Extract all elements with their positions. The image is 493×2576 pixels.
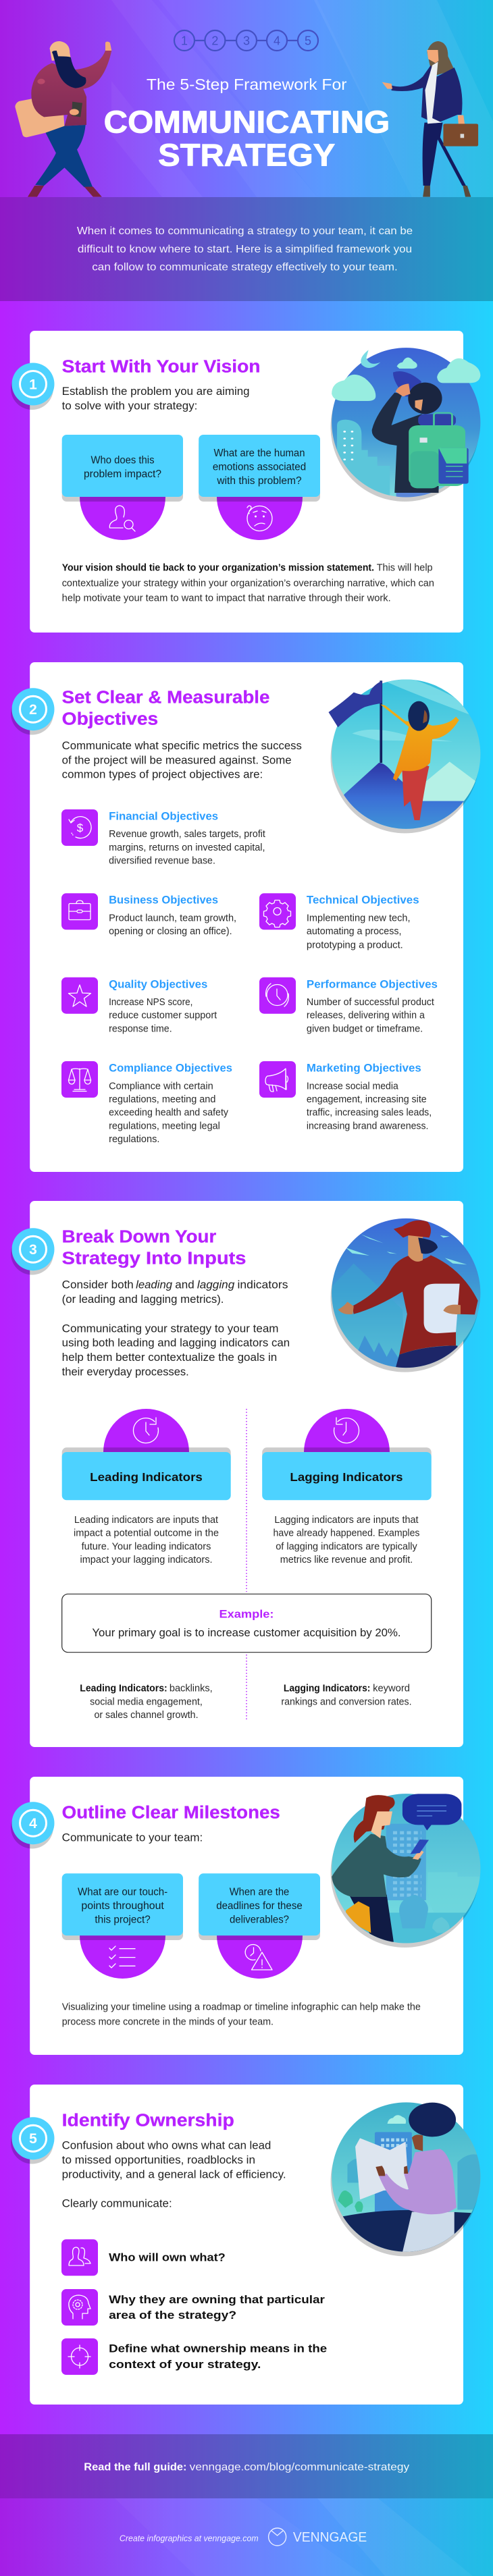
heading: Strategy Into Inputs bbox=[62, 1250, 246, 1268]
intro band bbox=[0, 197, 493, 301]
badge 3: 3 bbox=[29, 1242, 37, 1258]
objective: performance: releases, delivering within a bbox=[307, 1011, 425, 1021]
objective: quality: Increase NPS score, bbox=[109, 997, 192, 1008]
question card: deadlines: deliverables? bbox=[230, 1914, 289, 1926]
question card: deadlines bbox=[199, 1873, 320, 1979]
question card: emotions: What are the human bbox=[213, 448, 305, 459]
leading examples: Leading Indicators: bbox=[80, 1684, 167, 1694]
intro text: leading bbox=[136, 1279, 173, 1291]
objective: business: Product launch, team growth, bbox=[109, 913, 236, 923]
icon: clock backward bbox=[334, 1418, 359, 1443]
badge 5: 5 bbox=[29, 2131, 37, 2147]
intro text: of the project will be measured against. Some bbox=[62, 754, 292, 766]
subtitle: The 5-Step Framework For bbox=[147, 76, 347, 93]
panel: step 4 outline clear milestones bbox=[11, 1777, 484, 2055]
question card: who: Who does this bbox=[90, 455, 155, 466]
intro text: productivity, and a general lack of efficiency. bbox=[62, 2168, 286, 2180]
step progress circles: 2 bbox=[211, 34, 218, 47]
question card: emotions: with this problem? bbox=[216, 475, 302, 487]
objective: financial: $ bbox=[77, 822, 84, 834]
badge 2: 2 bbox=[29, 702, 37, 718]
intro text: Communicate to your team: bbox=[62, 1831, 203, 1844]
leading indicators card: Leading Indicators bbox=[90, 1470, 203, 1484]
item: why they are owning: Why they are owning that particular bbox=[109, 2293, 325, 2306]
illustration: hiker with binoculars bbox=[331, 348, 480, 504]
intro text: common types of project objectives are: bbox=[62, 769, 263, 781]
panel: step 2 set clear & measurable objectives bbox=[11, 662, 484, 1172]
question card: emotions bbox=[199, 435, 320, 540]
objective: financial: diversified revenue base. bbox=[109, 855, 215, 866]
example callout: Example: bbox=[219, 1609, 274, 1621]
intro text: difficult to know where to start. Here is a simplified framework you bbox=[78, 244, 412, 255]
objective: technical: Implementing new tech, bbox=[307, 913, 411, 923]
objective: marketing: traffic, increasing sales leads, bbox=[307, 1108, 432, 1119]
objective: technical: prototyping a product. bbox=[307, 940, 403, 950]
illustration: woman planting flag on a peak bbox=[327, 678, 484, 833]
heading: Outline Clear Milestones bbox=[62, 1803, 280, 1822]
lagging examples: keyword bbox=[373, 1684, 410, 1694]
leading indicators card bbox=[62, 1409, 231, 1500]
intro text bbox=[62, 2140, 286, 2209]
lagging indicators card bbox=[262, 1409, 432, 1500]
lagging indicators card: Lagging Indicators bbox=[290, 1470, 403, 1484]
item: why they are owning: area of the strategy? bbox=[109, 2309, 236, 2322]
dotted divider bbox=[246, 1409, 247, 1721]
leading description: impact your lagging indicators. bbox=[80, 1555, 212, 1565]
intro text: Confusion about who owns what can lead bbox=[62, 2140, 271, 2152]
body paragraph: process more concrete in the minds of your team. bbox=[62, 2016, 274, 2027]
heading: Identify Ownership bbox=[62, 2111, 234, 2130]
intro text bbox=[62, 740, 302, 781]
lagging description: of lagging indicators are typically bbox=[276, 1541, 417, 1552]
lagging examples: Lagging Indicators: bbox=[284, 1684, 370, 1694]
objective: financial: margins, returns on invested capital, bbox=[109, 842, 265, 853]
question card: touch-points: What are our touch- bbox=[78, 1886, 167, 1898]
badge 1: 1 bbox=[29, 377, 37, 393]
venngage wordmark: VENNGAGE bbox=[293, 2530, 367, 2545]
example callout bbox=[62, 1594, 432, 1653]
objective: technical bbox=[259, 893, 419, 950]
leading description: Leading indicators are inputs that bbox=[74, 1515, 218, 1526]
heading: Start With Your Vision bbox=[62, 358, 260, 377]
objective: compliance: regulations. bbox=[109, 1134, 159, 1145]
heading bbox=[62, 689, 269, 729]
intro text: can follow to communicate strategy effectively to your team. bbox=[92, 262, 398, 273]
item: who will own what bbox=[61, 2239, 226, 2276]
intro text: their everyday processes. bbox=[62, 1366, 189, 1378]
intro text: help them better contextualize the goals in bbox=[62, 1351, 277, 1364]
example callout: Your primary goal is to increase customer acquisition by 20%. bbox=[92, 1627, 401, 1639]
item: define ownership bbox=[61, 2338, 327, 2375]
question card: emotions: emotions associated bbox=[213, 462, 306, 473]
intro text: Communicate what specific metrics the success bbox=[62, 740, 302, 752]
badge 1 bbox=[11, 363, 54, 410]
body paragraph bbox=[62, 563, 434, 604]
heading: Objectives bbox=[62, 710, 158, 729]
intro text: Communicating your strategy to your team bbox=[62, 1322, 278, 1335]
leading examples bbox=[80, 1684, 213, 1721]
lagging description bbox=[274, 1515, 419, 1565]
leading description bbox=[74, 1515, 219, 1565]
question card: deadlines: deadlines for these bbox=[216, 1900, 303, 1912]
read the guide link: Read the full guide: bbox=[84, 2461, 186, 2473]
badge 2 bbox=[11, 688, 54, 734]
objective: financial: Revenue growth, sales targets, profit bbox=[109, 829, 265, 840]
objective: technical: automating a process, bbox=[307, 926, 401, 937]
step progress circles: 5 bbox=[305, 34, 311, 47]
panel: hero header bbox=[0, 0, 493, 197]
badge 4: 4 bbox=[29, 1816, 37, 1831]
lagging examples bbox=[281, 1684, 412, 1708]
badge 3 bbox=[11, 1228, 54, 1274]
item: who will own what: Who will own what? bbox=[109, 2251, 226, 2263]
objective: business bbox=[61, 893, 236, 937]
title bbox=[104, 105, 390, 173]
branding footer bbox=[0, 2498, 493, 2576]
icon: confused face bbox=[247, 506, 272, 531]
objective: marketing bbox=[259, 1061, 432, 1131]
step progress circles bbox=[174, 30, 318, 51]
panel: step 3 break down your strategy into inputs bbox=[11, 1201, 480, 1747]
question card: touch-points: this project? bbox=[95, 1914, 151, 1926]
heading: Set Clear & Measurable bbox=[62, 689, 269, 707]
icon: venngage logo bbox=[269, 2528, 286, 2546]
body paragraph: Your vision should tie back to your organization’s mission statement. bbox=[62, 563, 374, 574]
intro text bbox=[62, 385, 250, 412]
objective: quality: response time. bbox=[109, 1023, 172, 1034]
objective: compliance: exceeding health and safety bbox=[109, 1108, 229, 1119]
item: define ownership: Define what ownership means in the bbox=[109, 2342, 327, 2355]
question card: who bbox=[62, 435, 183, 540]
question card: touch-points bbox=[62, 1873, 183, 1979]
intro text bbox=[62, 1279, 290, 1378]
body paragraph: contextualize your strategy within your organization’s overarching narrative, which can bbox=[62, 578, 434, 589]
intro text: to missed opportunities, roadblocks in bbox=[62, 2154, 255, 2166]
intro text: Clearly communicate: bbox=[62, 2197, 172, 2209]
body paragraph bbox=[62, 2002, 421, 2027]
question card: who: problem impact? bbox=[84, 468, 161, 480]
intro text: Consider both bbox=[62, 1279, 134, 1291]
badge 4 bbox=[11, 1802, 54, 1848]
panel: step 5 identify ownership bbox=[11, 2085, 484, 2405]
body paragraph: help motivate your team to want to impact that narrative through their work. bbox=[62, 593, 391, 604]
heading: Break Down Your bbox=[62, 1228, 216, 1247]
objective: financial bbox=[61, 809, 265, 866]
heading bbox=[62, 1228, 246, 1268]
objective: quality: Quality Objectives bbox=[109, 978, 207, 990]
objective: financial: Financial Objectives bbox=[109, 810, 218, 822]
lagging examples: rankings and conversion rates. bbox=[281, 1697, 412, 1708]
objective: quality: reduce customer support bbox=[109, 1011, 217, 1021]
step progress circles: 4 bbox=[274, 34, 280, 47]
intro text: lagging bbox=[197, 1279, 235, 1291]
objective: compliance bbox=[61, 1061, 232, 1145]
step progress circles: 3 bbox=[243, 34, 250, 47]
read the guide link: venngage.com/blog/communicate-strategy bbox=[190, 2461, 409, 2473]
question card: deadlines: When are the bbox=[230, 1886, 289, 1898]
illustration: person reading a book bbox=[327, 2102, 484, 2256]
intro text: and bbox=[175, 1279, 194, 1291]
icon: checklist bbox=[109, 1946, 135, 1968]
credit line: Create infographics at venngage.com bbox=[120, 2533, 259, 2543]
intro text: using both leading and lagging indicators can bbox=[62, 1337, 290, 1349]
illustration: woman with briefcase bbox=[382, 41, 478, 197]
objective: compliance: Compliance with certain bbox=[109, 1081, 213, 1092]
read the guide link bbox=[84, 2461, 409, 2473]
panel: step 1 start with your vision bbox=[11, 331, 480, 633]
objective: marketing: Marketing Objectives bbox=[307, 1063, 421, 1075]
objective: compliance: regulations, meeting legal bbox=[109, 1121, 220, 1131]
leading description: future. Your leading indicators bbox=[82, 1541, 211, 1552]
body paragraph: This will help bbox=[377, 563, 433, 574]
objective: technical: Technical Objectives bbox=[307, 894, 419, 907]
illustration: bearded man with envelope bbox=[15, 41, 111, 197]
objective: performance: given budget or timeframe. bbox=[307, 1023, 423, 1034]
leading examples: backlinks, bbox=[170, 1684, 213, 1694]
icon: clock forward bbox=[133, 1418, 158, 1443]
intro text bbox=[77, 225, 413, 273]
step progress circles: 1 bbox=[181, 34, 188, 47]
lagging description: have already happened. Examples bbox=[274, 1528, 419, 1539]
intro text: to solve with your strategy: bbox=[62, 400, 197, 412]
objective: quality bbox=[61, 977, 217, 1034]
title: COMMUNICATING bbox=[104, 105, 390, 140]
intro text: (or leading and lagging metrics). bbox=[62, 1293, 224, 1306]
objective: compliance: Compliance Objectives bbox=[109, 1063, 232, 1075]
lagging description: Lagging indicators are inputs that bbox=[274, 1515, 419, 1526]
leading examples: social media engagement, bbox=[90, 1697, 203, 1708]
question card: touch-points: points throughout bbox=[81, 1900, 164, 1912]
body paragraph: Visualizing your timeline using a roadmap or timeline infographic can help make the bbox=[62, 2002, 421, 2012]
objective: performance: Number of successful product bbox=[307, 997, 434, 1008]
leading examples: or sales channel growth. bbox=[94, 1710, 199, 1721]
icon: person search bbox=[109, 506, 135, 531]
footer band bbox=[0, 2434, 493, 2498]
objective: performance bbox=[259, 977, 438, 1034]
item: define ownership: context of your strategy. bbox=[109, 2358, 261, 2371]
intro text: indicators bbox=[238, 1279, 288, 1291]
item: why they are owning bbox=[61, 2289, 325, 2326]
lagging description: metrics like revenue and profit. bbox=[280, 1555, 413, 1565]
illustration: woman with phone bbox=[331, 1794, 484, 1948]
leading description: impact a potential outcome in the bbox=[74, 1528, 219, 1539]
objective: compliance: regulations, meeting and bbox=[109, 1094, 215, 1105]
title: STRATEGY bbox=[158, 138, 335, 173]
objective: marketing: engagement, increasing site bbox=[307, 1094, 427, 1105]
intro text: When it comes to communicating a strategy to your team, it can be bbox=[77, 225, 413, 237]
intro text: Establish the problem you are aiming bbox=[62, 385, 250, 398]
illustration: person in red cap with paper bbox=[327, 1218, 480, 1372]
objective: performance: Performance Objectives bbox=[307, 978, 438, 990]
objective: business: Business Objectives bbox=[109, 894, 218, 907]
badge 5 bbox=[11, 2117, 54, 2164]
objective: marketing: Increase social media bbox=[307, 1081, 399, 1092]
icon: clock warning bbox=[245, 1944, 272, 1970]
objective: marketing: increasing brand awareness. bbox=[307, 1121, 428, 1131]
objective: business: opening or closing an office). bbox=[109, 926, 232, 937]
